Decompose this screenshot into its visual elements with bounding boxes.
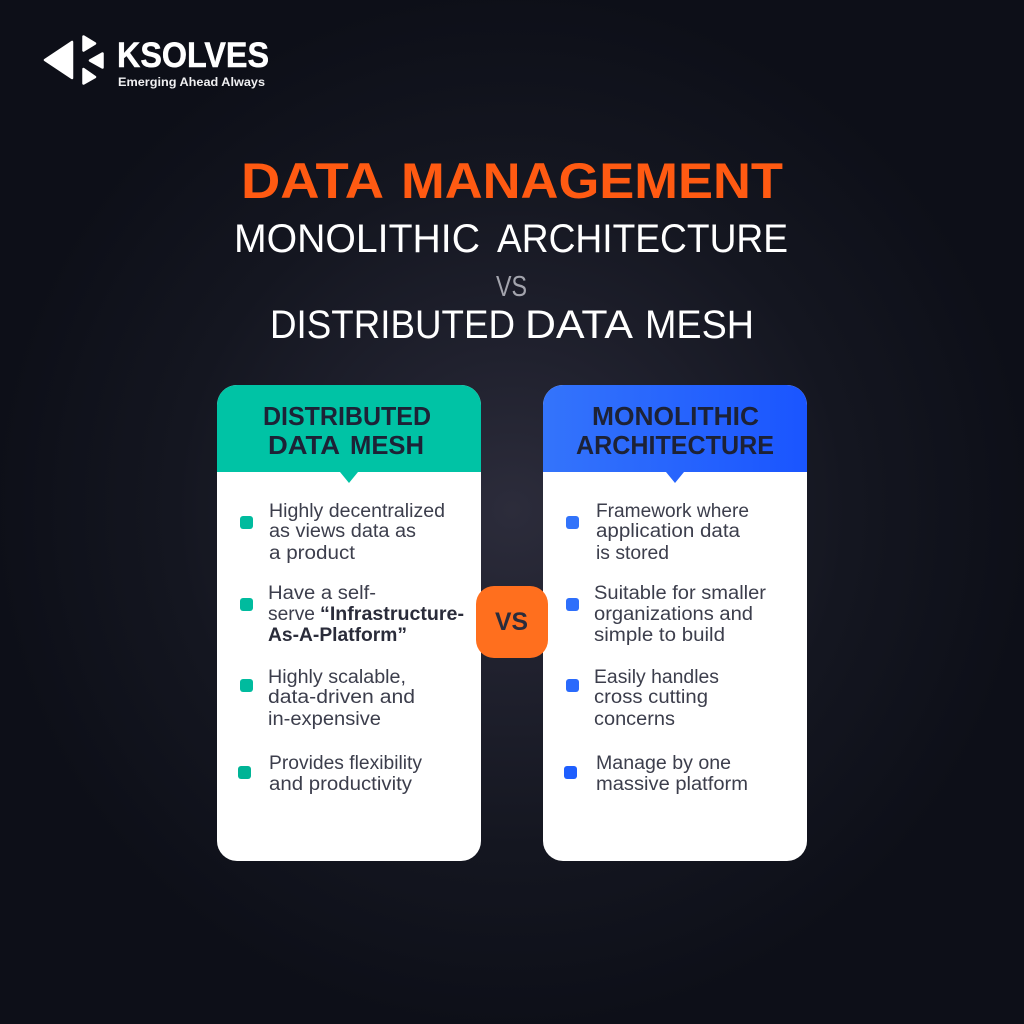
subheading: monolithic architecture: MONOLITHIC [234, 217, 480, 261]
bullet 2: organizations and [594, 604, 753, 625]
bullet 1: is stored [596, 543, 669, 564]
subheading: monolithic architecture: ARCHITECTURE [497, 217, 788, 261]
panel: distributed data mesh [217, 385, 481, 861]
vs badge [476, 586, 548, 658]
title [234, 153, 788, 347]
panel: monolithic architecture [543, 385, 807, 861]
subheading: distributed data mesh [270, 303, 754, 347]
bullet 3: data-driven and [268, 687, 415, 708]
bullet 1: as views data as [269, 521, 416, 542]
bullet 3 [240, 667, 415, 730]
bullet 1 [566, 501, 749, 564]
icon: logo triangles [45, 36, 102, 84]
bullet 3: Easily handles [594, 667, 719, 688]
logo [45, 36, 269, 89]
subheading: vs: VS [496, 271, 527, 303]
bullet 3: in-expensive [268, 709, 381, 730]
bullet 3: cross cutting [594, 687, 708, 708]
heading: data management [241, 153, 783, 209]
bullet 2: simple to build [594, 625, 725, 646]
bullet 4: and productivity [269, 774, 413, 795]
subheading: distributed data mesh: DISTRIBUTED [270, 303, 515, 347]
bullet 1: a product [269, 543, 356, 564]
bullet 2: serve [268, 604, 315, 625]
bullet 2: Suitable for smaller [594, 583, 767, 604]
bullet 2: As-A-Platform” [268, 625, 407, 646]
bullet 4: Provides flexibility [269, 753, 423, 774]
bullet 1: Framework where [596, 501, 749, 522]
heading: data management: DATA [241, 153, 384, 209]
bullet 1: application data [596, 521, 740, 542]
panel header: DATA [268, 430, 340, 460]
panel header: MESH [350, 430, 424, 460]
heading: data management: MANAGEMENT [401, 153, 783, 209]
bullet 1 [240, 501, 445, 564]
bullet 2 [566, 583, 767, 646]
bullet 3 [566, 667, 719, 730]
subheading: distributed data mesh: DATA [525, 303, 633, 347]
bullet 4 [238, 753, 423, 795]
bullet 2: “Infrastructure- [320, 604, 464, 625]
bullet 2: Have a self- [268, 583, 376, 604]
panel header: ARCHITECTURE [576, 430, 774, 460]
bullet 4 [564, 753, 748, 795]
logo tagline: Emerging Ahead Always [118, 75, 265, 89]
bullet 1: Highly decentralized [269, 501, 445, 522]
subheading: monolithic architecture [234, 217, 788, 261]
bullet 3: concerns [594, 709, 675, 730]
panel header [543, 385, 807, 483]
subheading: distributed data mesh: MESH [645, 303, 754, 347]
logo wordmark: KSOLVES [117, 36, 269, 75]
panel header [217, 385, 481, 483]
bullet 3: Highly scalable, [268, 667, 406, 688]
bullet 4: massive platform [596, 774, 748, 795]
panel header: MONOLITHIC [592, 401, 759, 431]
bullet 2 [240, 583, 464, 646]
panel header: DISTRIBUTED [263, 401, 431, 431]
vs badge: VS [495, 608, 528, 636]
bullet 4: Manage by one [596, 753, 731, 774]
